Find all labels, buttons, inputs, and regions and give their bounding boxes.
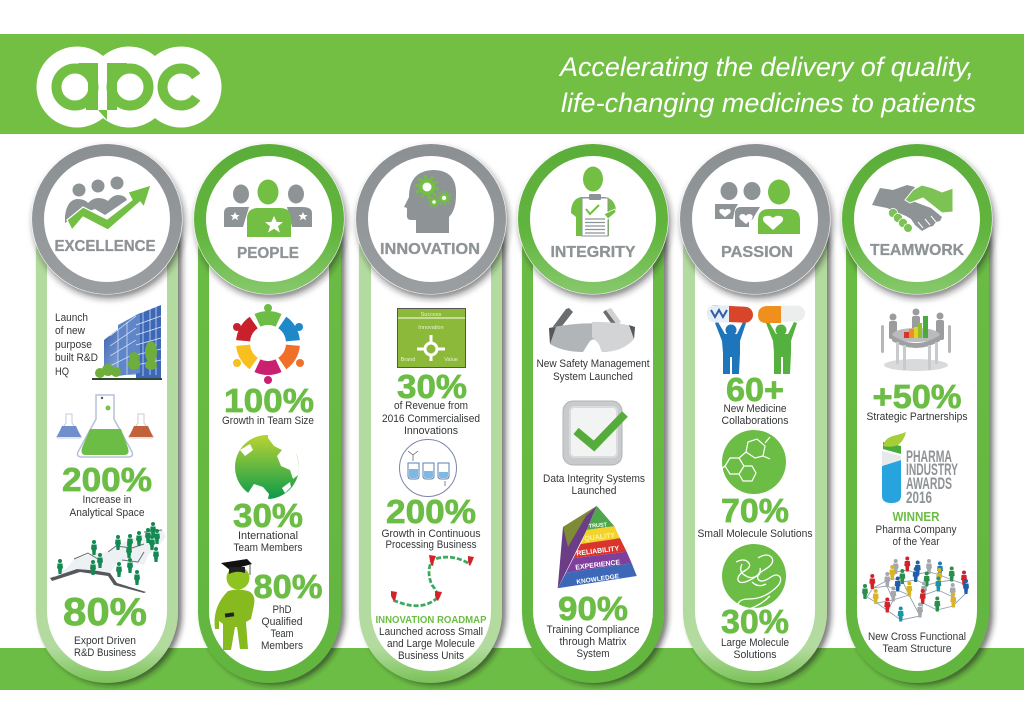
heading: winner: WINNER — [892, 510, 940, 524]
text: increase in analytical space: Analytical Space — [70, 507, 144, 519]
icon: success roundabout sign: Brand — [401, 357, 415, 363]
icon: lab flasks — [57, 395, 153, 457]
text: cross functional team structure: Team Structure — [882, 643, 952, 655]
footer band — [0, 648, 1024, 690]
heading: innovation roadmap: INNOVATION ROADMAP — [376, 614, 486, 626]
text: international team members: Team Members — [234, 542, 303, 554]
tagline — [558, 52, 976, 118]
text: launch of R&D HQ: of new — [55, 325, 85, 337]
text: increase in analytical space: Increase in — [82, 494, 132, 506]
text: training compliance: through Matrix — [560, 636, 627, 648]
text: pharma company of the year — [876, 524, 957, 548]
stat: 80%: 80% — [63, 591, 147, 634]
stat: 200%: 200% — [62, 461, 152, 498]
text: data integrity systems: Data Integrity Systems — [543, 473, 645, 485]
text: revenue from innovations: Innovations — [404, 425, 458, 437]
icon: success roundabout sign — [398, 308, 466, 368]
stat: 30% revenue: 30% — [397, 368, 467, 405]
icon: large molecule helix — [722, 544, 786, 610]
icon: pharma industry awards tube — [882, 432, 906, 503]
text: safety management system: New Safety Management — [536, 358, 650, 370]
pill frame — [198, 180, 341, 683]
text: strategic partnerships: Strategic Partnerships — [866, 411, 968, 423]
text: roadmap description: Business Units — [398, 650, 464, 662]
text: safety management system — [536, 358, 650, 383]
icon: continuous processing beakers — [400, 440, 456, 496]
award name: 2016 — [906, 489, 932, 507]
icon: safety goggles — [549, 308, 635, 352]
panel: innovation — [356, 144, 506, 683]
stat: 30%: 30% — [233, 497, 303, 534]
panel: integrity — [518, 144, 668, 683]
icon: values pyramid: KNOWLEDGE — [576, 573, 620, 586]
badge ring — [842, 144, 992, 294]
icon: values pyramid — [558, 506, 637, 588]
icon: export map — [50, 522, 166, 593]
pill interior — [695, 190, 815, 671]
icon: success roundabout sign: Success — [421, 312, 442, 318]
badge label: PASSION — [721, 244, 793, 261]
icon: check box — [563, 401, 625, 465]
text: large molecule solutions — [721, 637, 789, 661]
header band — [0, 34, 1024, 134]
pill frame — [36, 180, 178, 683]
text: export driven business: R&D Business — [74, 647, 136, 659]
icon: person with clipboard — [571, 166, 616, 236]
badge label: INNOVATION — [380, 241, 480, 258]
icon: handshake — [872, 185, 953, 232]
pill interior — [47, 190, 167, 671]
badge label: EXCELLENCE — [54, 238, 156, 255]
icon: values pyramid: QUALITY — [584, 532, 616, 543]
pill frame — [846, 180, 989, 683]
award name: PHARMA — [906, 448, 952, 466]
icon: team circle — [233, 304, 304, 384]
text: medicine collaborations: Collaborations — [722, 415, 789, 427]
tagline: Accelerating the delivery of quality, — [558, 52, 974, 82]
icon: figures lifting capsules — [707, 305, 805, 374]
icon: team with stars — [224, 180, 312, 237]
text: data integrity systems: Launched — [572, 485, 616, 497]
badge ring — [194, 144, 344, 294]
text: large molecule solutions: Solutions — [734, 649, 777, 661]
text: PhD qualified team members: PhD — [272, 604, 292, 616]
text: launch of R&D HQ — [55, 312, 98, 378]
icon: people network — [862, 556, 969, 622]
award name: INDUSTRY — [906, 461, 958, 479]
icon: values pyramid: RELIABILITY — [576, 545, 620, 558]
badge ring — [518, 144, 668, 294]
text: medicine collaborations — [722, 403, 789, 427]
text: pharma company of the year: of the Year — [892, 536, 940, 548]
text: export driven business — [74, 635, 136, 659]
icon: success roundabout sign: Value — [444, 357, 458, 363]
text: roadmap description — [379, 626, 483, 662]
pill frame — [683, 180, 827, 683]
icon: roadmap with pins — [391, 555, 474, 606]
stat: 200% processing: 200% — [386, 493, 476, 530]
icon: small molecule — [719, 430, 786, 494]
icon: team with rising arrow — [65, 176, 151, 230]
text: PhD qualified team members: Members — [261, 640, 303, 652]
pill frame — [522, 180, 664, 683]
text: data integrity systems — [543, 473, 645, 497]
award name — [906, 448, 958, 507]
icon: meeting table with chart — [881, 308, 951, 371]
stat: 100%: 100% — [224, 382, 314, 419]
text: revenue from innovations: 2016 Commercialised — [382, 413, 480, 425]
text: international team members: International — [238, 530, 298, 542]
text: PhD qualified team members — [261, 604, 303, 652]
badge ring — [32, 144, 182, 294]
icon: success roundabout sign: Innovation — [418, 325, 444, 331]
panel: teamwork — [842, 144, 992, 683]
panel: excellence — [32, 144, 182, 683]
stat: 30% large molecule: 30% — [721, 603, 789, 640]
text: launch of R&D HQ: HQ — [55, 366, 69, 378]
stat: 70%: 70% — [721, 492, 789, 529]
text: export driven business: Export Driven — [74, 635, 136, 647]
badge label: TEAMWORK — [870, 242, 965, 259]
text: roadmap description: and Large Molecule — [387, 638, 475, 650]
pill interior — [857, 190, 977, 671]
icon: values pyramid: TRUST — [589, 522, 608, 530]
icon: values pyramid: EXPERIENCE — [575, 559, 621, 572]
text: cross functional team structure — [868, 631, 966, 655]
panel: passion — [680, 144, 830, 683]
text: small molecule solutions: Small Molecule Solutions — [698, 528, 813, 540]
text: continuous processing — [382, 528, 481, 551]
icon: people with hearts — [715, 180, 800, 234]
text: continuous processing: Processing Business — [386, 539, 477, 551]
icon: globe — [235, 435, 299, 499]
text: international team members — [234, 530, 303, 554]
badge ring — [680, 144, 830, 294]
text: revenue from innovations — [382, 400, 480, 437]
pill interior — [371, 190, 491, 671]
text: training compliance — [546, 624, 640, 660]
badge label: INTEGRITY — [550, 244, 636, 261]
stat: +50%: +50% — [872, 378, 962, 415]
text: roadmap description: Launched across Small — [379, 626, 483, 638]
pill frame — [359, 180, 502, 683]
text: revenue from innovations: of Revenue from — [394, 400, 468, 412]
award name: AWARDS — [906, 475, 952, 493]
text: training compliance: System — [576, 648, 610, 660]
text: pharma company of the year: Pharma Company — [876, 524, 957, 536]
stat: 80% PhD: 80% — [254, 568, 322, 605]
text: large molecule solutions: Large Molecule — [721, 637, 789, 649]
text: launch of R&D HQ: built R&D — [55, 352, 98, 364]
text: increase in analytical space — [70, 494, 144, 519]
text: training compliance: Training Compliance — [546, 624, 640, 636]
text: medicine collaborations: New Medicine — [724, 403, 786, 415]
icon: office building — [92, 305, 162, 380]
pill interior — [533, 190, 653, 671]
text: PhD qualified team members: Qualified — [262, 616, 302, 628]
text: launch of R&D HQ: purpose — [55, 339, 92, 351]
text: safety management system: System Launched — [553, 371, 633, 383]
stat: 60+: 60+ — [726, 371, 784, 408]
icon: graduate figure — [215, 559, 254, 650]
stat: 90%: 90% — [558, 590, 628, 627]
icon: head with gears — [404, 170, 456, 233]
text: launch of R&D HQ: Launch — [55, 312, 88, 324]
text: PhD qualified team members: Team — [270, 628, 294, 640]
badge ring — [356, 144, 506, 294]
text: cross functional team structure: New Cross Functional — [868, 631, 966, 643]
text: growth in team size: Growth in Team Size — [222, 415, 314, 427]
panel: people — [194, 144, 344, 683]
pill interior — [209, 190, 329, 671]
badge label: PEOPLE — [237, 245, 299, 262]
logo: apc — [36, 46, 222, 128]
tagline: life-changing medicines to patients — [561, 88, 976, 118]
text: continuous processing: Growth in Continuous — [382, 528, 481, 540]
